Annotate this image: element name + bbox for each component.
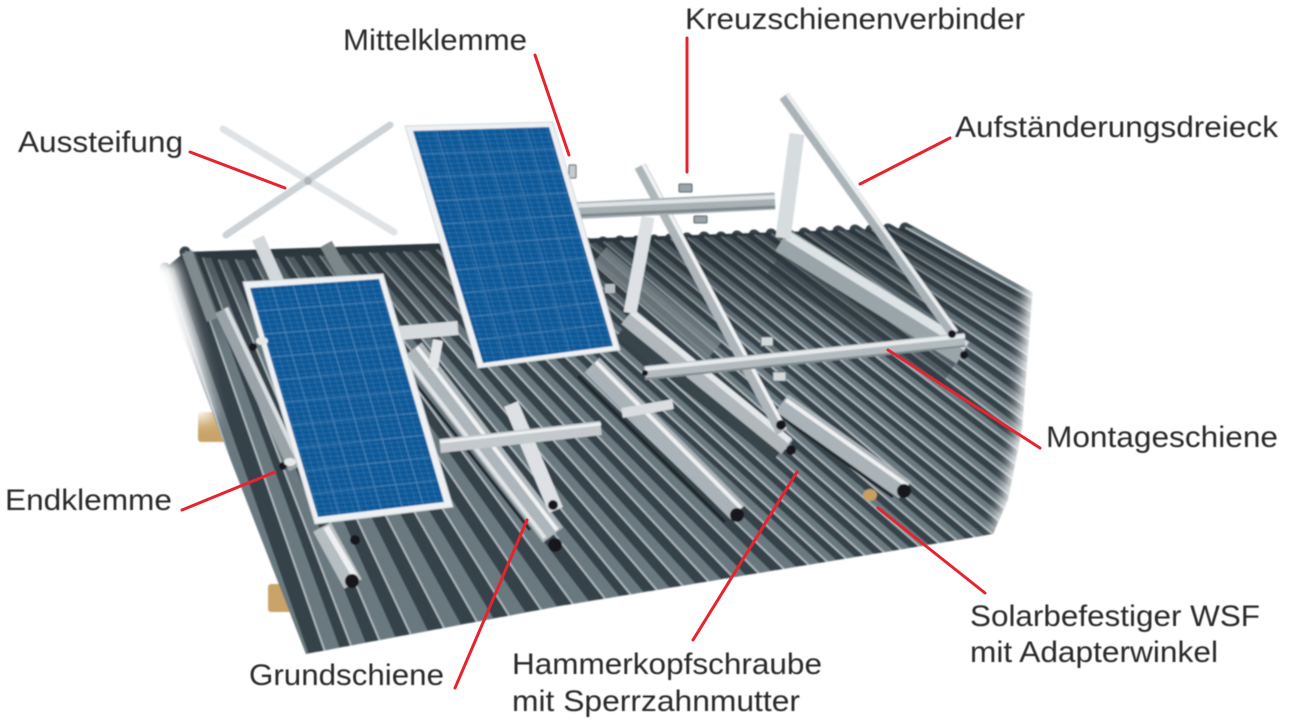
roof edge fade right [992,280,1075,545]
labels: mit Sperrzahnmutter [512,685,800,718]
labels: Aufständerungsdreieck [955,111,1278,144]
mounting triangle rear right [775,94,966,372]
clamps and rail ends [249,284,968,588]
cross rail connectors [569,165,707,223]
labels: Grundschiene [249,659,444,692]
base rails on the roof [187,238,908,584]
solar panel front [243,274,453,524]
rail right [775,400,908,497]
rail centre [578,255,741,522]
artwork: roof and mounting system [160,92,1033,655]
rail far left [222,308,357,584]
mounting triangle front middle [621,164,790,456]
labels: Hammerkopfschraube [512,648,822,681]
wooden roof battens [198,412,298,612]
solar panel rear [405,122,620,368]
labels: Aussteifung [18,126,183,159]
labels: Montageschiene [1046,421,1278,454]
labels: Mittelklemme [343,24,527,57]
rear stubs [187,238,353,320]
cross rail upper [570,197,775,216]
cross bracing [223,125,394,235]
cross rails lower [440,336,965,446]
support below rear panel [400,328,458,368]
rail centre left [397,347,557,538]
red leader lines [182,38,1040,688]
corrugated metal roof [160,222,1033,655]
solar fastener WSF [863,489,877,501]
roof edge fade left [130,240,214,420]
labels: mit Adapterwinkel [970,636,1218,669]
labels: Solarbefestiger WSF [970,600,1260,633]
labels: Kreuzschienenverbinder [685,3,1025,36]
labels: Endklemme [5,484,172,517]
